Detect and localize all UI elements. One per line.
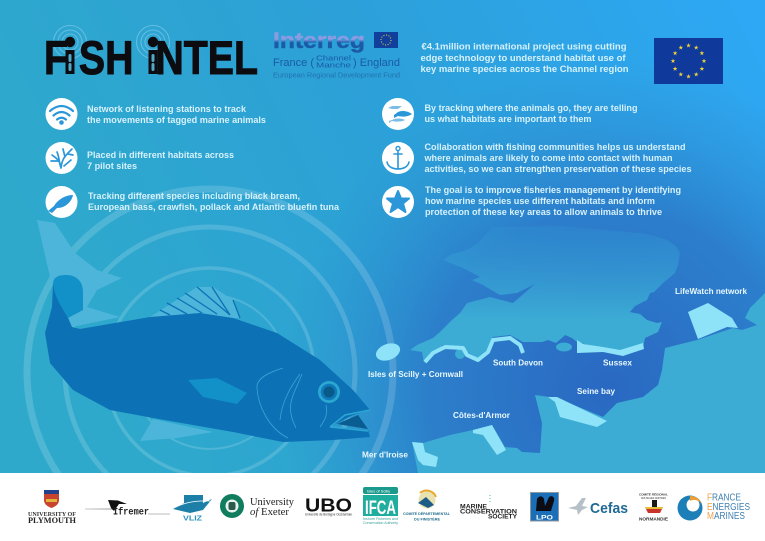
item: habitats: 7 pilot sites [87, 160, 137, 171]
footer band [0, 473, 765, 541]
logo: IFCA: Inshore Fisheries and [363, 517, 398, 521]
tail lobe [53, 275, 83, 318]
item: goal: protection of these key areas to allow animals to thrive [425, 206, 662, 217]
gill lines [257, 368, 327, 438]
Interreg logo: France ( [273, 57, 314, 69]
dorsal spines [160, 287, 240, 318]
logo: University of Exeter [220, 494, 294, 518]
site: Cotes-d'Armor [473, 425, 506, 455]
logo: Marine Conservation Society: SOCIETY [488, 514, 518, 520]
logo: IFCA: Conservation Authority [363, 521, 398, 525]
logo: VLIZ [173, 495, 212, 522]
site: Seine bay [548, 397, 607, 427]
logo: University of Plymouth: PLYMOUTH [28, 516, 77, 525]
icon: fish school [382, 98, 414, 130]
icon: tuna [46, 186, 78, 218]
item: fishing communities: Collaboration with fishing communities helps us understand [424, 141, 686, 152]
Interreg logo [273, 28, 400, 80]
logo: Comite departemental du Finistere [403, 490, 451, 522]
item: goal: The goal is to improve fisheries management by identifying [425, 184, 681, 195]
map labels: Seine bay [577, 386, 615, 396]
land: England and Wales [410, 226, 680, 363]
item: species: European bass, crawfish, pollack and Atlantic bluefin tuna [88, 201, 340, 212]
item: fishing communities: where animals are likely to come into contact with human [424, 152, 673, 163]
small EU flag [374, 32, 398, 48]
item: fishing communities [382, 141, 692, 174]
logo: University of Plymouth [28, 490, 77, 525]
project summary [420, 40, 629, 74]
Interreg logo: Manche [316, 60, 351, 70]
logo: IFCA: Isles of Scilly [367, 488, 390, 494]
belly fin [140, 419, 213, 441]
project summary: key marine species across the Channel region [420, 63, 629, 74]
map labels: Sussex [603, 358, 632, 368]
item: listening stations: Network of listening stations to track [87, 103, 247, 114]
logo: Comite departemental du Finistere: COMITÉ DÉPARTEMENTAL [403, 511, 451, 516]
item: tracking animals [382, 98, 638, 130]
land: France, Belgium and the Netherlands [412, 293, 765, 473]
sonar rings [27, 189, 393, 541]
logo: Normandie fisheries committee: DES PECHES MARITIMES [641, 496, 666, 500]
land: Isle of Wight [556, 342, 572, 352]
pectoral fin [188, 378, 247, 404]
Interreg logo: ) England [353, 57, 400, 69]
icon: coral [46, 142, 78, 174]
logo: University of Exeter: University [250, 496, 294, 508]
site: Cornwall and South Devon coast [425, 338, 523, 362]
logo: UBO: Université de Bretagne Occidentale [305, 512, 352, 516]
tagged i letters [65, 37, 158, 74]
Interreg logo: Channel [316, 54, 351, 62]
logo: IFCA: IFCA [365, 498, 396, 519]
logo: France Energies Marines [678, 492, 750, 522]
logo: Cefas [568, 498, 628, 517]
logo: Marine Conservation Society [460, 495, 518, 520]
tagged fish marks [68, 54, 154, 71]
logo: Marine Conservation Society: MARINE [460, 504, 488, 510]
item: goal: how marine species use different habitats and inform [425, 195, 655, 206]
logo: France Energies Marines: MARINES [707, 510, 745, 522]
map labels: Mer d'Iroise [362, 450, 408, 460]
Interreg logo: Interreg [273, 28, 365, 53]
icon: starfish [382, 186, 414, 218]
item: listening stations [46, 98, 266, 130]
logo: LPO [530, 492, 558, 522]
project summary: €4.1million international project using cutting [422, 40, 627, 52]
item: species [46, 186, 340, 218]
logo: Normandie fisheries committee: COMITÉ RÉGIONAL [639, 492, 668, 496]
site: Mer d'Iroise [412, 442, 438, 467]
title: FiSH iNTEL [44, 31, 258, 84]
item: goal [382, 184, 681, 218]
logo: France Energies Marines: ENERGIES [707, 501, 750, 513]
icon: anchor [382, 142, 414, 174]
EU flag [654, 38, 723, 84]
logo: Ifremer [85, 500, 170, 518]
site: LifeWatch network [688, 303, 738, 339]
map labels: LifeWatch network [675, 286, 747, 296]
eye [318, 381, 340, 403]
item: tracking animals: us what habitats are important to them [424, 113, 592, 124]
logo: VLIZ: VLIZ [183, 514, 202, 522]
logo: Marine Conservation Society: CONSERVATION [460, 508, 517, 516]
map labels: Isles of Scilly + Cornwall [368, 369, 463, 379]
item: habitats [46, 142, 234, 174]
logo: Normandie fisheries committee: NORMANDIE [639, 516, 668, 522]
logo: IFCA [363, 487, 398, 525]
item: listening stations: the movements of tagged marine animals [87, 114, 266, 125]
logo: Cefas: Cefas [590, 500, 628, 517]
Interreg logo: European Regional Development Fund [273, 70, 400, 80]
project summary: edge technology to understand habitat use of [420, 52, 626, 63]
site: Sussex [577, 340, 644, 356]
item: species: Tracking different species including black bream, [88, 190, 300, 201]
title logo [44, 26, 258, 84]
logo: UBO: UBO [305, 496, 352, 516]
map of the Channel [374, 226, 765, 473]
logo: Comite departemental du Finistere: DU FINISTÈRE [414, 516, 440, 522]
dorsal fin [150, 287, 240, 318]
map labels [362, 286, 747, 460]
icon: wifi [46, 98, 78, 130]
logo: LPO: LPO [536, 514, 553, 522]
site: Isles of Scilly [374, 340, 402, 364]
body [45, 283, 370, 442]
map labels: Côtes-d'Armor [453, 410, 511, 420]
fish illustration [37, 220, 370, 442]
logo: University of Plymouth: UNIVERSITY OF [28, 512, 76, 518]
map labels: South Devon [493, 358, 543, 368]
item: tracking animals: By tracking where the animals go, they are telling [424, 102, 638, 113]
signal rings [54, 26, 170, 58]
logo: Ifremer: Ifremer [113, 506, 149, 518]
far tail and back fin [37, 220, 122, 328]
item: fishing communities: activities, so we can strengthen preservation of these species [424, 163, 692, 174]
logo: France Energies Marines: FRANCE [707, 492, 741, 504]
item: habitats: Placed in different habitats across [87, 149, 234, 160]
bay blob [455, 349, 465, 359]
logo: University of Exeter: of Exeter [250, 506, 289, 518]
mouth [330, 410, 370, 431]
logo: Normandie fisheries committee [639, 492, 668, 522]
